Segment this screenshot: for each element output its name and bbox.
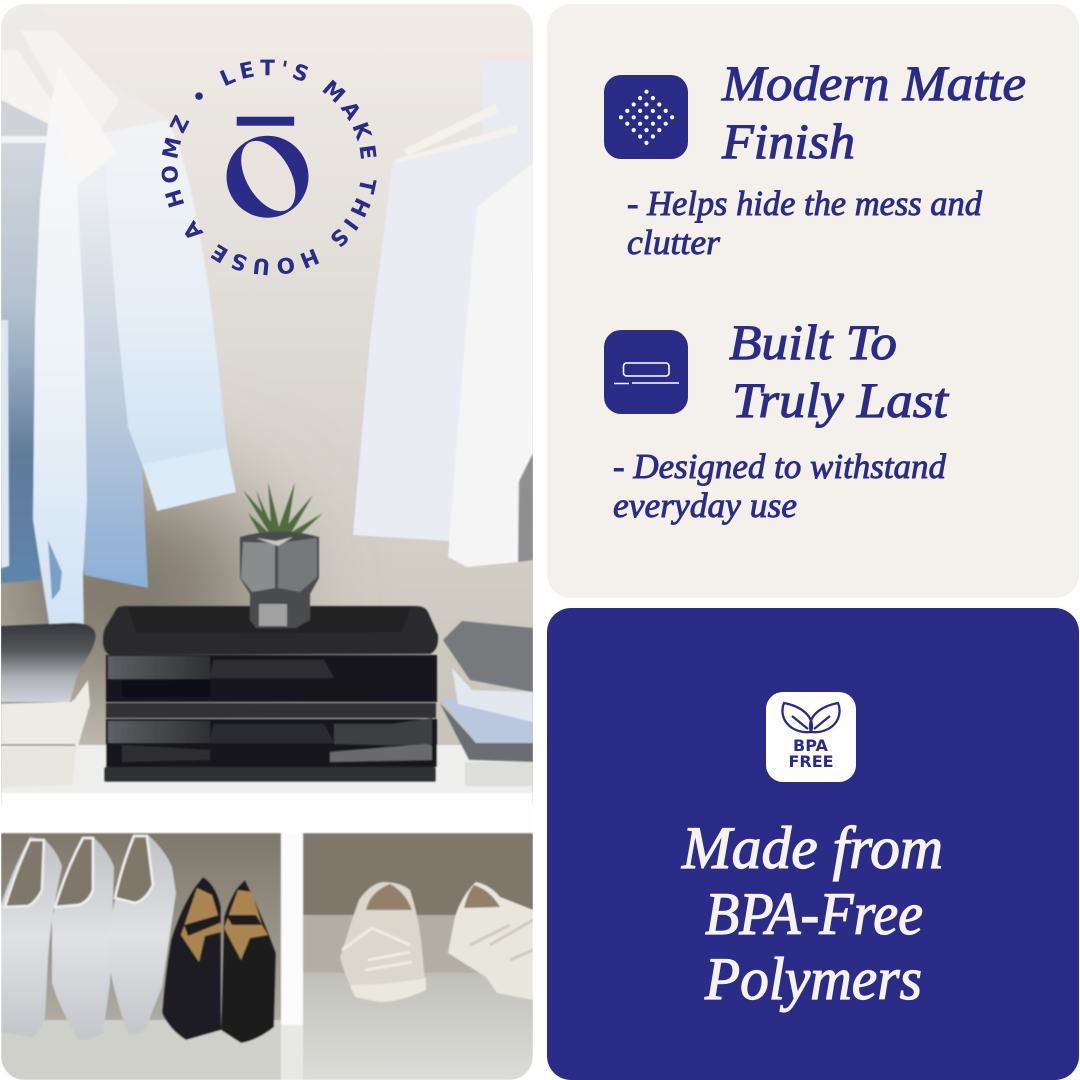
icon: bpa free leaves xyxy=(766,692,856,782)
text: helps hide the mess xyxy=(627,184,982,262)
heading: made from bpa-free polymers: Made from xyxy=(681,815,943,881)
black drawer unit xyxy=(103,606,438,782)
heading: made from bpa-free polymers: BPA-Free xyxy=(705,881,923,947)
panel: features xyxy=(547,4,1079,598)
text: designed to withstand: everyday use xyxy=(613,486,797,525)
silver shoes xyxy=(1,835,176,1040)
icon: bpa free leaves: BPA xyxy=(793,736,828,755)
panel: bpa free xyxy=(547,608,1079,1080)
text: designed to withstand: - Designed to withstand xyxy=(613,447,946,486)
heading: built to truly last: Built To xyxy=(729,314,897,370)
heading: built to truly last xyxy=(729,314,949,428)
text: helps hide the mess: clutter xyxy=(627,223,720,262)
panel: closet photo xyxy=(0,4,533,1080)
badge ring text: LET'S MAKE THIS HOUSE A HOMZ • xyxy=(162,60,377,276)
icon: matte dots xyxy=(604,75,688,159)
circular brand badge xyxy=(162,60,377,276)
photo contents xyxy=(1,5,533,1080)
logo: o with macron xyxy=(226,117,308,220)
icon: durable drawer xyxy=(604,330,688,414)
black loafers xyxy=(162,877,276,1043)
heading: modern matte finish xyxy=(721,55,1026,169)
hanging white garments xyxy=(353,60,533,567)
heading: modern matte finish: Modern Matte xyxy=(721,55,1026,111)
heading: built to truly last: Truly Last xyxy=(732,372,949,428)
closet wall xyxy=(0,4,533,804)
heading: modern matte finish: Finish xyxy=(721,113,855,169)
folded clothes left xyxy=(1,623,96,788)
hanging blue shirts xyxy=(1,5,236,632)
lower shelf back and floor xyxy=(1,833,533,1080)
heading: made from bpa-free polymers: Polymers xyxy=(704,946,922,1012)
plant in geometric pot xyxy=(240,482,323,628)
icon: bpa free leaves: FREE xyxy=(788,752,834,771)
shelf top xyxy=(1,745,533,793)
text: designed to withstand xyxy=(613,447,946,525)
cream sneakers xyxy=(340,882,533,1002)
heading: made from bpa-free polymers xyxy=(681,815,943,1012)
folded clothes right xyxy=(440,621,533,786)
text: helps hide the mess: - Helps hide the mess and xyxy=(627,184,982,223)
